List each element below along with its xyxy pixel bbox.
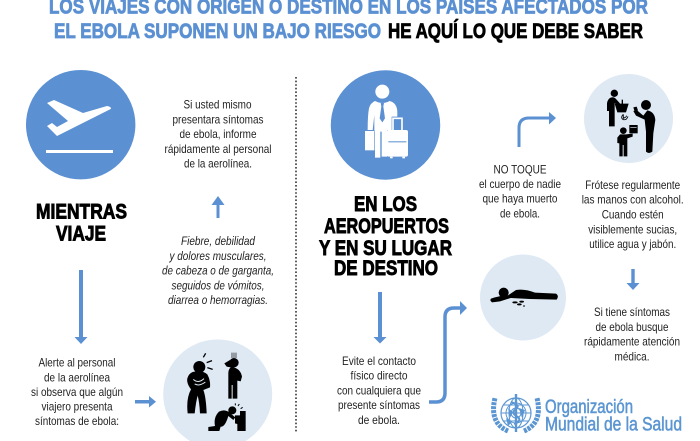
- text: avoid contact: [337, 355, 421, 427]
- text: rub hands: Frótese regularmente: [585, 179, 680, 192]
- text: rub hands: las manos con alcohol.: [582, 194, 684, 207]
- heading: airports and destination: EN LOS: [354, 193, 417, 216]
- text: seek medical attention: de ebola busque: [596, 321, 668, 334]
- text: if you have symptoms: de ebola, informe: [180, 128, 256, 141]
- text: seek medical attention: Si tiene síntomas: [594, 306, 670, 319]
- text: avoid contact: de ebola.: [358, 414, 400, 427]
- text: if you have symptoms: rápidamente al personal: [164, 143, 272, 156]
- text: alert crew: Alerte al personal: [38, 357, 116, 370]
- text: list of symptoms: diarrea o hemorragias.: [168, 294, 268, 307]
- icon: body on the floor: [480, 254, 566, 340]
- icon: traveller with luggage: [331, 70, 440, 180]
- arrow: down from heading: [374, 292, 386, 344]
- text: seek medical attention: rápidamente atención: [584, 336, 680, 349]
- text: do not touch: [479, 163, 561, 220]
- text: avoid contact: presente síntomas: [338, 399, 420, 412]
- icon: symptoms figures: [163, 340, 272, 441]
- text: alert crew: síntomas de ebola:: [35, 415, 119, 428]
- text: if you have symptoms: Si usted mismo: [184, 99, 252, 112]
- text: alert crew: si observa que algún: [31, 386, 123, 399]
- text: rub hands: utilice agua y jabón.: [589, 238, 676, 251]
- title: [49, 0, 648, 43]
- text: avoid contact: con cualquiera que: [337, 384, 421, 398]
- arrow: curved up to hand hygiene: [519, 112, 556, 147]
- text: seek medical attention: médica.: [614, 350, 650, 364]
- icon: airplane taking off: [26, 70, 135, 179]
- text: list of symptoms: Fiebre, debilidad: [181, 235, 255, 248]
- heading: airports and destination: [319, 193, 452, 280]
- text: if you have symptoms: presentara síntomas: [172, 113, 264, 126]
- logo: organization name: [545, 397, 682, 436]
- text: do not touch: el cuerpo de nadie: [479, 178, 561, 191]
- arrow: up: [212, 196, 224, 218]
- heading: mientras viaje: VIAJE: [56, 222, 106, 246]
- text: rub hands: visiblemente sucias,: [588, 223, 677, 236]
- text: alert crew: de la aerolínea: [44, 371, 110, 384]
- text: avoid contact: físico directo: [350, 370, 408, 383]
- text: alert crew: [31, 357, 123, 428]
- text: list of symptoms: seguidos de vómitos,: [172, 279, 264, 292]
- text: alert crew: viajero presenta: [42, 401, 113, 414]
- text: list of symptoms: [162, 235, 274, 307]
- text: seek medical attention: [584, 306, 680, 364]
- icon: hand washing figures: [584, 74, 673, 163]
- text: if you have symptoms: [164, 99, 272, 171]
- arrow: down from heading: [74, 270, 88, 344]
- heading: airports and destination: DE DESTINO: [334, 257, 438, 280]
- heading: airports and destination: AEROPUERTOS: [324, 215, 449, 238]
- arrow: curved to body icon: [429, 301, 467, 402]
- heading: airports and destination: Y EN SU LUGAR: [319, 237, 452, 260]
- text: do not touch: que haya muerto: [482, 193, 558, 206]
- text: rub hands: [582, 179, 684, 251]
- text: do not touch: NO TOQUE: [494, 163, 547, 176]
- logo: organization name: Organización: [545, 397, 633, 418]
- title: EL EBOLA SUPONEN UN BAJO RIESGO: [54, 19, 381, 43]
- text: list of symptoms: y dolores musculares,: [169, 250, 266, 263]
- text: avoid contact: Evite el contacto: [342, 355, 416, 368]
- text: do not touch: de ebola.: [500, 208, 540, 220]
- text: rub hands: Cuando estén: [602, 208, 664, 222]
- arrow: down: [626, 269, 640, 290]
- arrow: right to symptoms: [135, 396, 156, 408]
- text: list of symptoms: de cabeza o de garganta,: [162, 265, 274, 278]
- text: if you have symptoms: de la aerolínea.: [184, 158, 252, 171]
- heading: mientras viaje: [36, 200, 127, 246]
- heading: mientras viaje: MIENTRAS: [36, 200, 127, 224]
- logo: WHO emblem: [494, 394, 538, 432]
